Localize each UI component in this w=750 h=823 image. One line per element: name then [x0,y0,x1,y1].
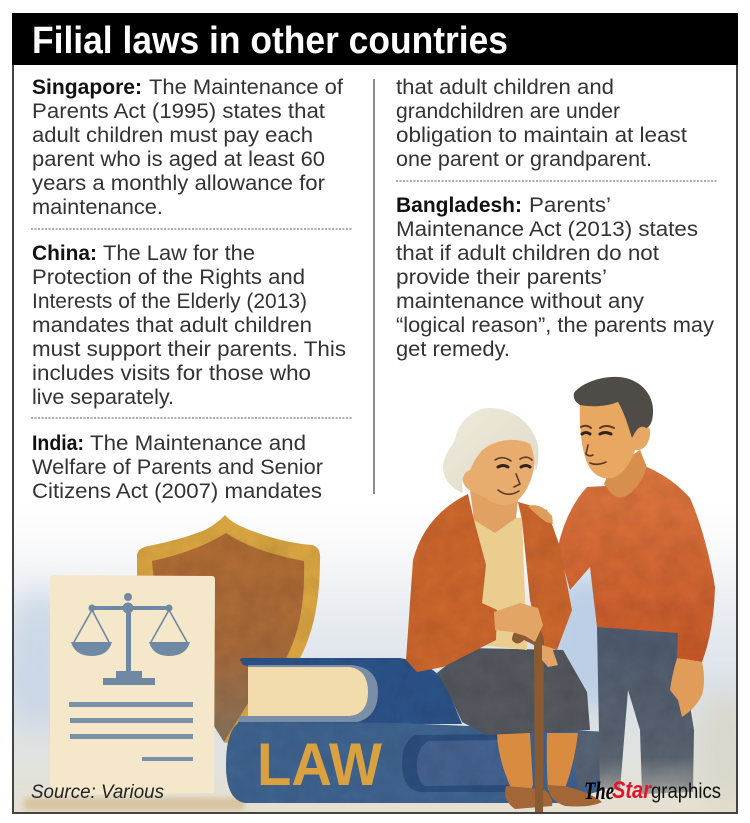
hand on shoulder [528,505,553,524]
document with scales of justice [50,575,215,795]
text: Bangladesh: Maintenance Act (2013) states [396,217,698,241]
text: India: Citizens Act (2007) mandates [32,479,322,503]
text: Singapore: parent who is aged at least 60 [32,147,325,171]
text: China: Interests of the Elderly (2013) [32,289,307,313]
cardigan left [406,494,497,672]
hanging hand [670,658,704,717]
title banner: Filial laws in other countries [32,20,508,62]
text: China [32,241,346,409]
watercolour backdrop [14,554,736,812]
text: Bangladesh: Bangladesh: [396,193,522,217]
stacked law books [226,658,613,803]
facial features [495,457,532,494]
skirt [437,648,590,735]
shirt [470,515,527,650]
head and ear [462,439,535,506]
text: China: The Law for the [103,241,255,265]
text: Bangladesh: maintenance without any [396,289,644,313]
upper book page edge [238,665,378,722]
cardigan right [518,502,572,650]
icon: scales of justice [71,593,190,685]
text: China: Protection of the Rights and [32,265,305,289]
text: Singapore: Parents Act (1995) states that [32,99,325,123]
text: Singapore: The Maintenance of [149,75,343,99]
text lines on paper [69,702,193,761]
cane [512,628,544,812]
text: China: China: [32,241,97,265]
hands on cane [494,603,558,667]
text: Bangladesh: provide their parents’ [396,265,607,289]
title banner [12,13,738,65]
text: China: includes visits for those who [32,361,311,385]
neck [470,490,518,533]
text: India continued: that adult children and [396,75,614,99]
text: Singapore: Singapore: [32,75,142,99]
text: India continued: one parent or grandparent. [396,147,652,171]
text: Bangladesh [396,193,714,361]
text: Singapore: years a monthly allowance for [32,171,325,195]
text: India [32,431,323,503]
hair [574,377,653,438]
text: India continued: grandchildren are under [396,99,620,123]
text: Bangladesh: that if adult children do not [396,241,659,265]
text: India: Welfare of Parents and Senior [32,455,323,479]
facial features [581,426,614,464]
logo: The Star graphics: Star [612,777,652,804]
lower book [226,722,613,803]
illustration: grandmother [406,408,602,812]
text: Singapore [32,75,343,219]
book title: LAW [257,731,382,798]
hair [443,408,538,493]
text: China: live separately. [32,385,174,409]
text: China: mandates that adult children [32,313,312,337]
text: India: The Maintenance and [90,431,306,455]
shoes [505,785,602,809]
illustration: son [558,377,715,794]
logo: The Star graphics: graphics [651,780,721,803]
text: China: must support their parents. This [32,337,346,361]
text: India continued [396,75,687,171]
sweater [558,467,715,662]
text: Bangladesh: Parents’ [529,193,611,217]
icon: shield [137,515,320,743]
text: Singapore: adult children must pay each [32,123,313,147]
logo: The Star graphics: The [584,778,614,805]
text: India continued: obligation to maintain at least [396,123,687,147]
text: Bangladesh: “logical reason”, the parents may [396,313,714,337]
text: Singapore: maintenance. [32,195,163,219]
logo: The Star graphics [584,777,721,805]
paper sheet [50,575,215,795]
head and ear [580,402,650,478]
neck [604,450,648,500]
trousers [597,625,694,794]
legs [497,733,578,792]
upper book [238,658,462,724]
source note: Source: Various [31,782,164,803]
text: India: India: [32,431,84,455]
text: Bangladesh: get remedy. [396,337,510,361]
